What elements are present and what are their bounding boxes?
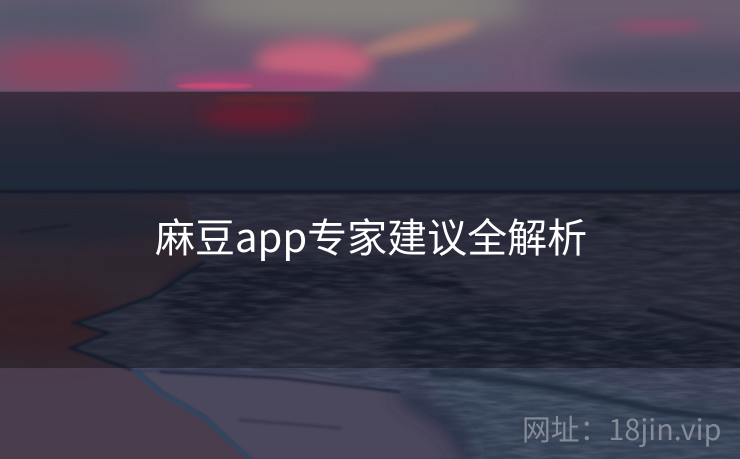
wet sand left: [0, 200, 250, 459]
dark wave ridges: [158, 259, 420, 336]
sea with sunset reflection: [0, 88, 740, 191]
sky: [0, 0, 740, 96]
dark translucent band: [0, 92, 740, 368]
dark waterline: [71, 262, 205, 370]
pale foam lower: [141, 372, 467, 459]
ripple texture: [92, 195, 740, 459]
ripple lines: [20, 206, 740, 428]
shore: [0, 189, 740, 459]
watermark url: 网址：18jin.vip: [522, 408, 721, 449]
water: [84, 316, 114, 347]
title: 麻豆app专家建议全解析: [155, 206, 587, 264]
